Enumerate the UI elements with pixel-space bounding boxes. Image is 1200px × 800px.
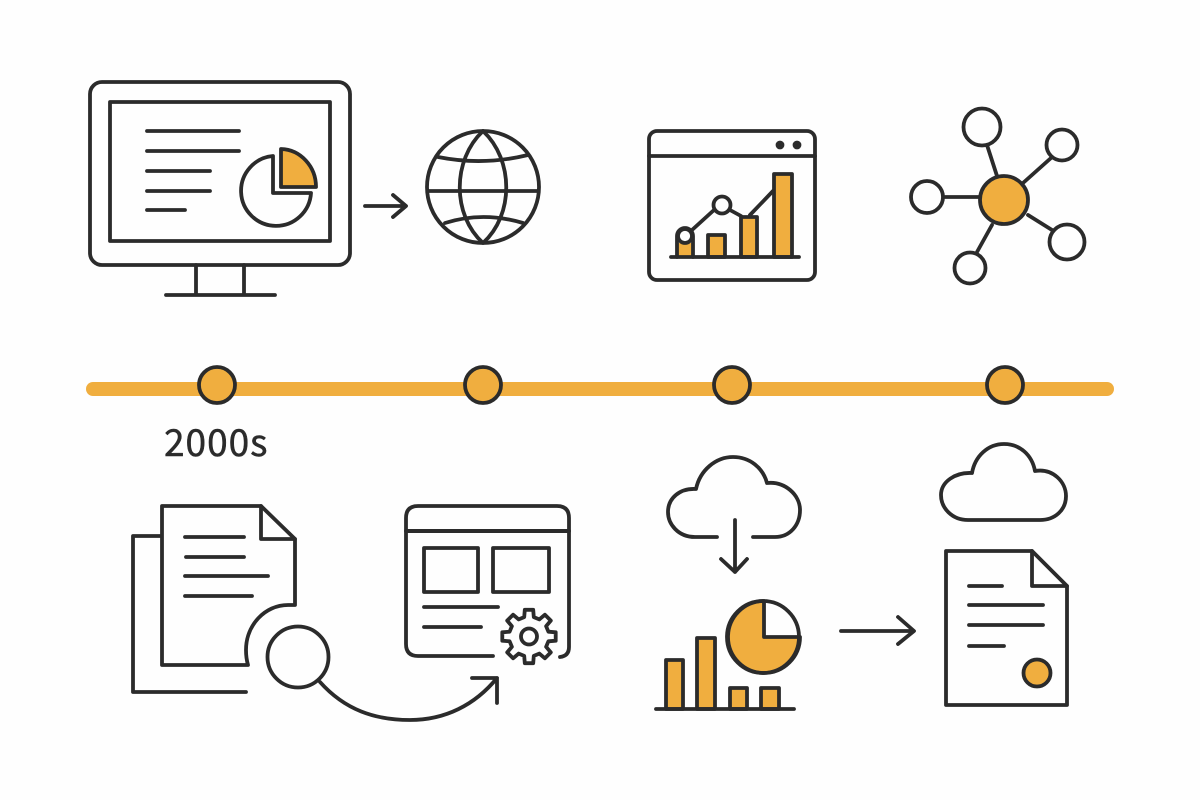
icon: network hub (911, 108, 1084, 284)
icon: browser chart (649, 131, 815, 280)
icon: browser layout with gear (406, 506, 569, 663)
label: 2000s: 2000s (164, 413, 268, 467)
arrow: monitor to globe (365, 195, 406, 217)
arrow: charts to document (841, 617, 914, 644)
icon: document with seal (946, 551, 1067, 705)
icon: documents and connector (133, 506, 497, 720)
timeline (93, 367, 1107, 403)
icon: cloud (941, 444, 1066, 520)
icon: globe (427, 131, 539, 243)
icon: bars and pie (656, 601, 800, 709)
icon: cloud download (668, 457, 800, 572)
icon: monitor with slide (90, 82, 350, 295)
